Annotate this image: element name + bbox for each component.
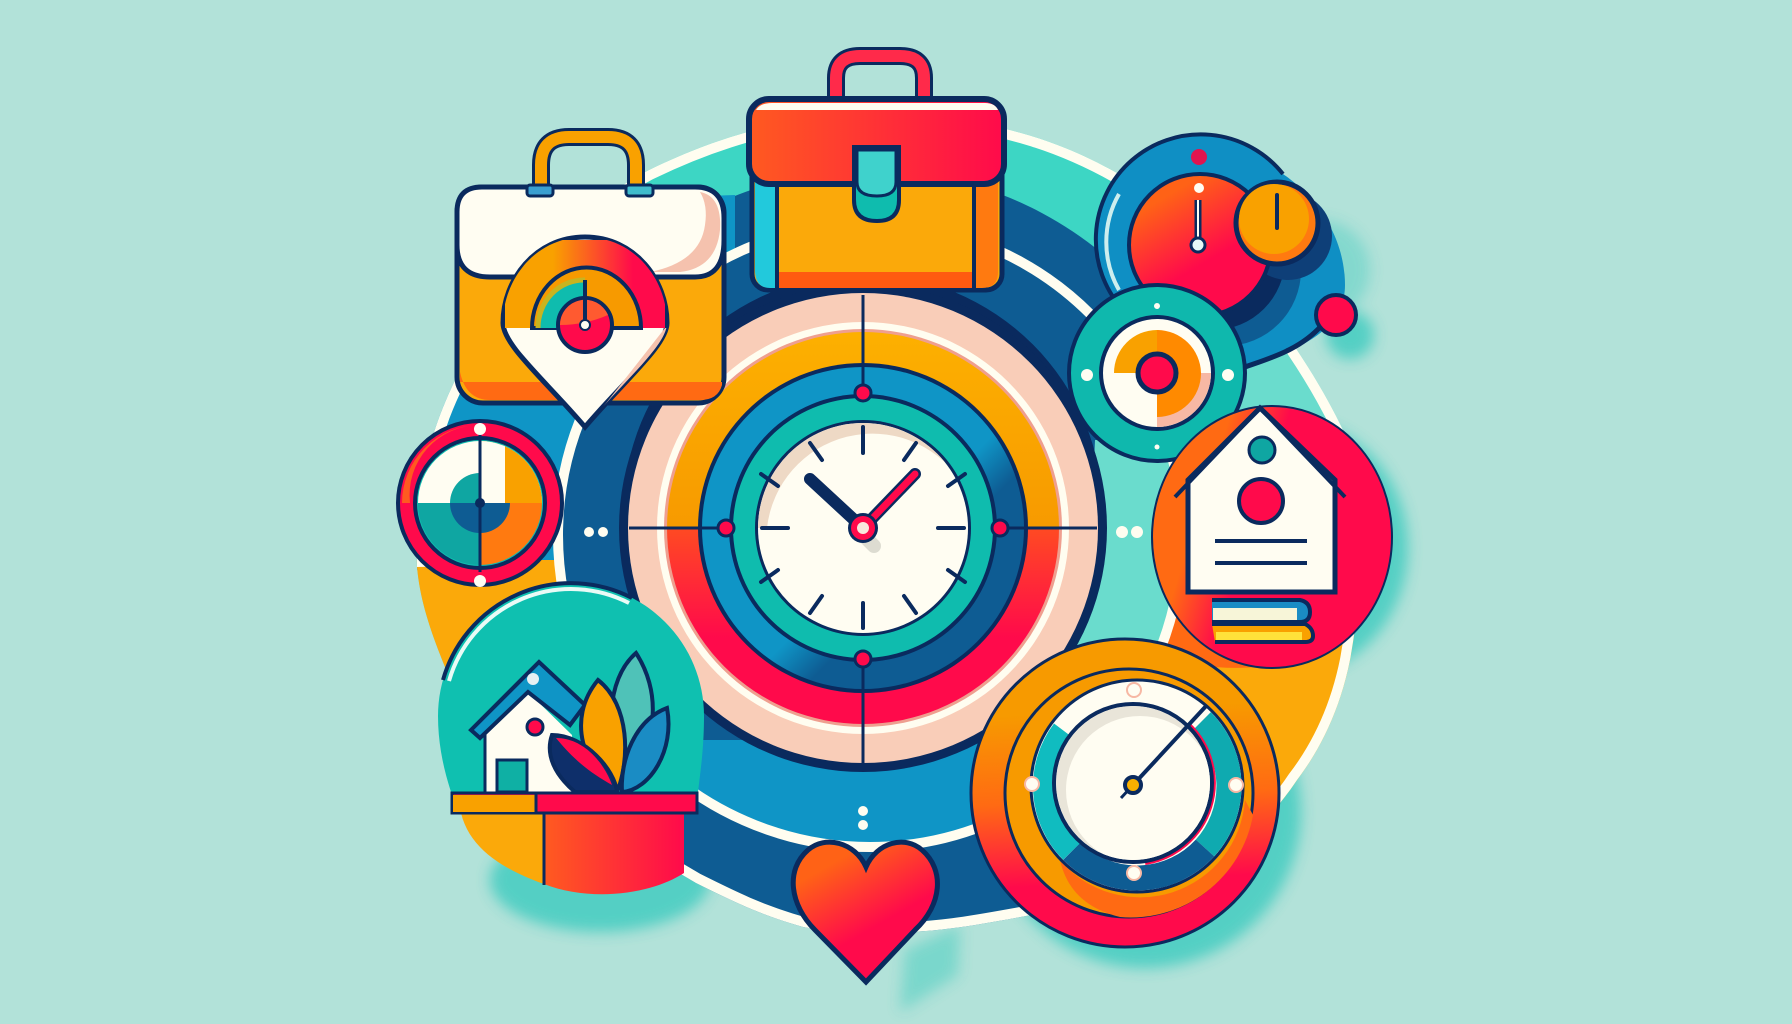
icon: heart — [793, 842, 937, 982]
central clock — [619, 274, 1107, 772]
icon: top right timers — [1096, 134, 1356, 367]
icon: left bag with pin — [457, 137, 724, 430]
icon: teal dial — [1069, 285, 1245, 461]
icon: home and plant — [438, 581, 704, 894]
cross lines — [629, 295, 1097, 766]
house — [471, 662, 585, 792]
clock hub — [848, 513, 878, 543]
location pin with gauge — [503, 237, 672, 430]
icon: house card with books — [1152, 406, 1392, 668]
briefcase clasp — [854, 147, 899, 221]
inner ring band — [553, 242, 1176, 852]
work-life balance illustration — [396, 47, 1417, 1014]
orange timer knob — [1236, 182, 1318, 264]
ring dots left — [584, 527, 608, 537]
briefcase handle — [836, 56, 924, 100]
speckled teal drop shadows — [490, 220, 1408, 1012]
ring dots right — [1116, 526, 1143, 538]
planter shelf — [452, 793, 697, 813]
clock ticks — [761, 427, 965, 628]
gauge needle hub — [1125, 777, 1141, 793]
icon: large gauge — [971, 639, 1279, 947]
icon: large briefcase — [749, 56, 1004, 290]
outer colored ring — [416, 129, 1354, 932]
red ball — [1316, 295, 1356, 335]
stacked books — [1212, 600, 1313, 642]
clock hands — [810, 474, 915, 546]
gauge pins — [1025, 683, 1243, 880]
house-shaped card — [1175, 408, 1345, 592]
gauge arcs — [1045, 721, 1229, 878]
red timer face — [1129, 149, 1271, 316]
icon: left gauge clock — [398, 421, 562, 587]
ring dots bottom — [858, 806, 868, 830]
bag handle — [541, 137, 636, 190]
clock ring pins — [718, 385, 1008, 667]
bag handle feet — [527, 185, 653, 196]
plant leaves — [550, 653, 669, 792]
